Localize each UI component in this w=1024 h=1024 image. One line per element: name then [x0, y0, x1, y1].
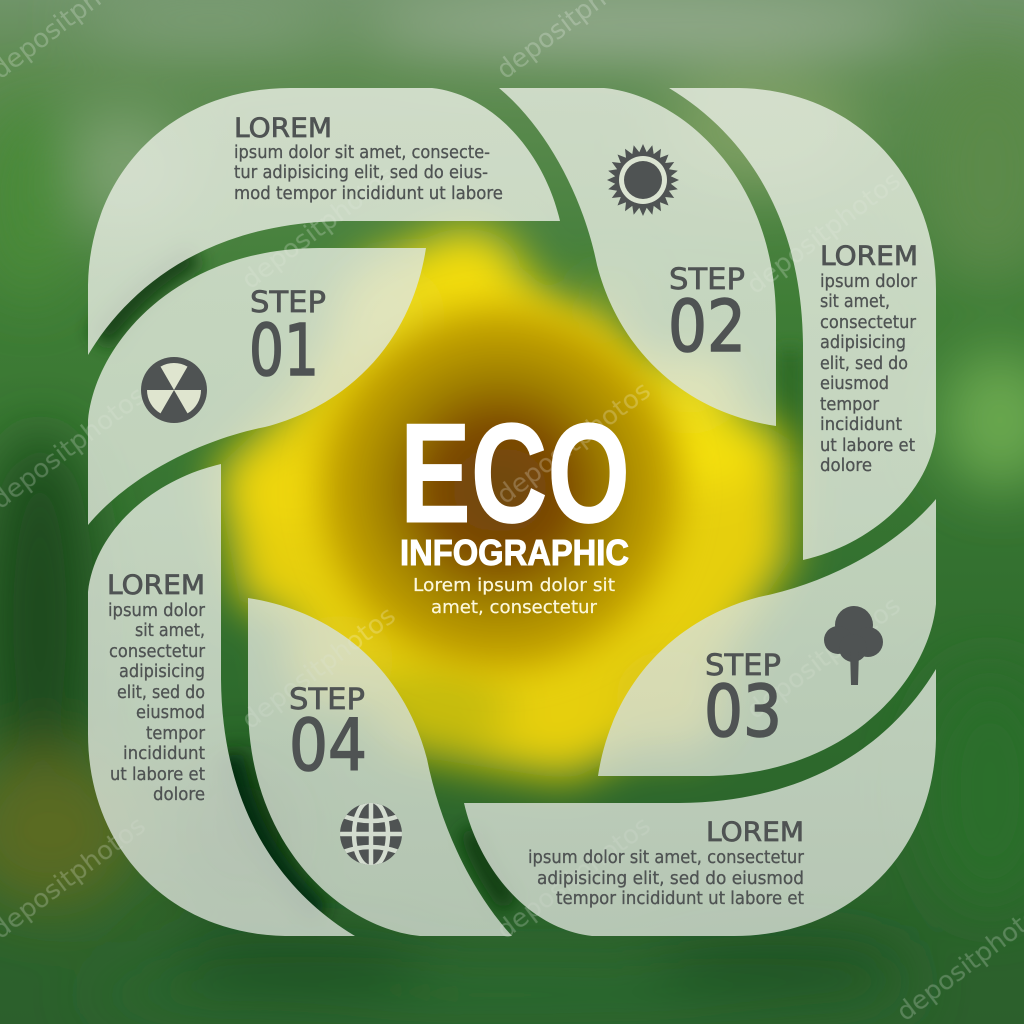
text block: right: dolore — [820, 455, 872, 476]
heading: bottom lorem: LOREM — [706, 817, 804, 848]
text block: right: ipsum dolor — [820, 271, 918, 292]
text block: top: tur adipisicing elit, sed do eius- — [234, 162, 488, 183]
text block: bottom: tempor incididunt ut labore et — [556, 888, 804, 909]
text block: right: incididunt — [820, 414, 902, 435]
watermarks: depositphotos — [491, 376, 656, 511]
text block: left: tempor — [146, 723, 206, 744]
text block: right: ut labore et — [820, 435, 915, 456]
text block: top: ipsum dolor sit amet, consecte- — [234, 142, 490, 163]
text block: left: consectetur — [109, 641, 206, 662]
panel: step 02 — [499, 88, 776, 426]
step 03 number: 03 — [704, 670, 782, 753]
step 02 label: STEP — [669, 262, 745, 296]
text block: left: elit, sed do — [117, 682, 205, 703]
watermarks: depositphotos — [236, 601, 401, 736]
panel: step 04 — [248, 598, 512, 936]
text block: left: sit amet, — [135, 620, 205, 641]
step 04 number: 04 — [289, 704, 367, 787]
text block: top: mod tempor incididunt ut labore — [234, 183, 503, 204]
text block: right: elit, sed do — [820, 353, 908, 374]
text block: right: adipisicing — [820, 332, 906, 353]
text block: left: ut labore et — [110, 764, 205, 785]
text block: right: consectetur — [820, 312, 917, 333]
step 01 label: STEP — [250, 285, 326, 319]
heading: left lorem: LOREM — [107, 570, 205, 601]
title: eco: ECO — [400, 394, 630, 553]
panel: top text — [88, 88, 560, 355]
heading: right lorem: LOREM — [820, 241, 918, 272]
text block: left: ipsum dolor — [108, 600, 206, 621]
step 01 number: 01 — [249, 309, 319, 392]
watermarks: depositphotos — [741, 166, 906, 301]
icon: sun — [607, 144, 679, 216]
text block: right: eiusmod — [820, 373, 889, 394]
text block: left: eiusmod — [136, 702, 205, 723]
text block: bottom: ipsum dolor sit amet, consectetur — [528, 847, 805, 868]
tagline: amet, consectetur — [431, 597, 598, 618]
panel: bottom text — [464, 669, 936, 936]
panel: step 03 — [598, 499, 936, 776]
centre title — [400, 394, 630, 618]
text block: left: incididunt — [123, 743, 205, 764]
icon: tree — [824, 606, 883, 685]
step 04 label: STEP — [289, 682, 365, 716]
heading: top lorem: LOREM — [234, 113, 332, 144]
step 03 label: STEP — [705, 648, 781, 682]
text block: right: tempor — [820, 394, 880, 415]
icon: globe — [339, 801, 403, 867]
watermarks: depositphotos — [741, 591, 906, 726]
text block: right: sit amet, — [820, 291, 890, 312]
panel: step 01 — [88, 248, 426, 525]
tagline: Lorem ipsum dolor sit — [413, 575, 615, 596]
step 02 number: 02 — [668, 285, 746, 368]
watermarks: depositphotos — [236, 161, 401, 296]
text block: left: adipisicing — [119, 661, 205, 682]
icon: radiation — [141, 357, 207, 423]
panel: right text — [669, 88, 936, 560]
subtitle: infographic: INFOGRAPHIC — [400, 532, 629, 573]
watermarks: depositphotos — [491, 811, 656, 946]
text block: left: dolore — [153, 784, 205, 805]
text block: bottom: adipisicing elit, sed do eiusmod — [537, 868, 804, 889]
panel: left text — [88, 464, 355, 936]
